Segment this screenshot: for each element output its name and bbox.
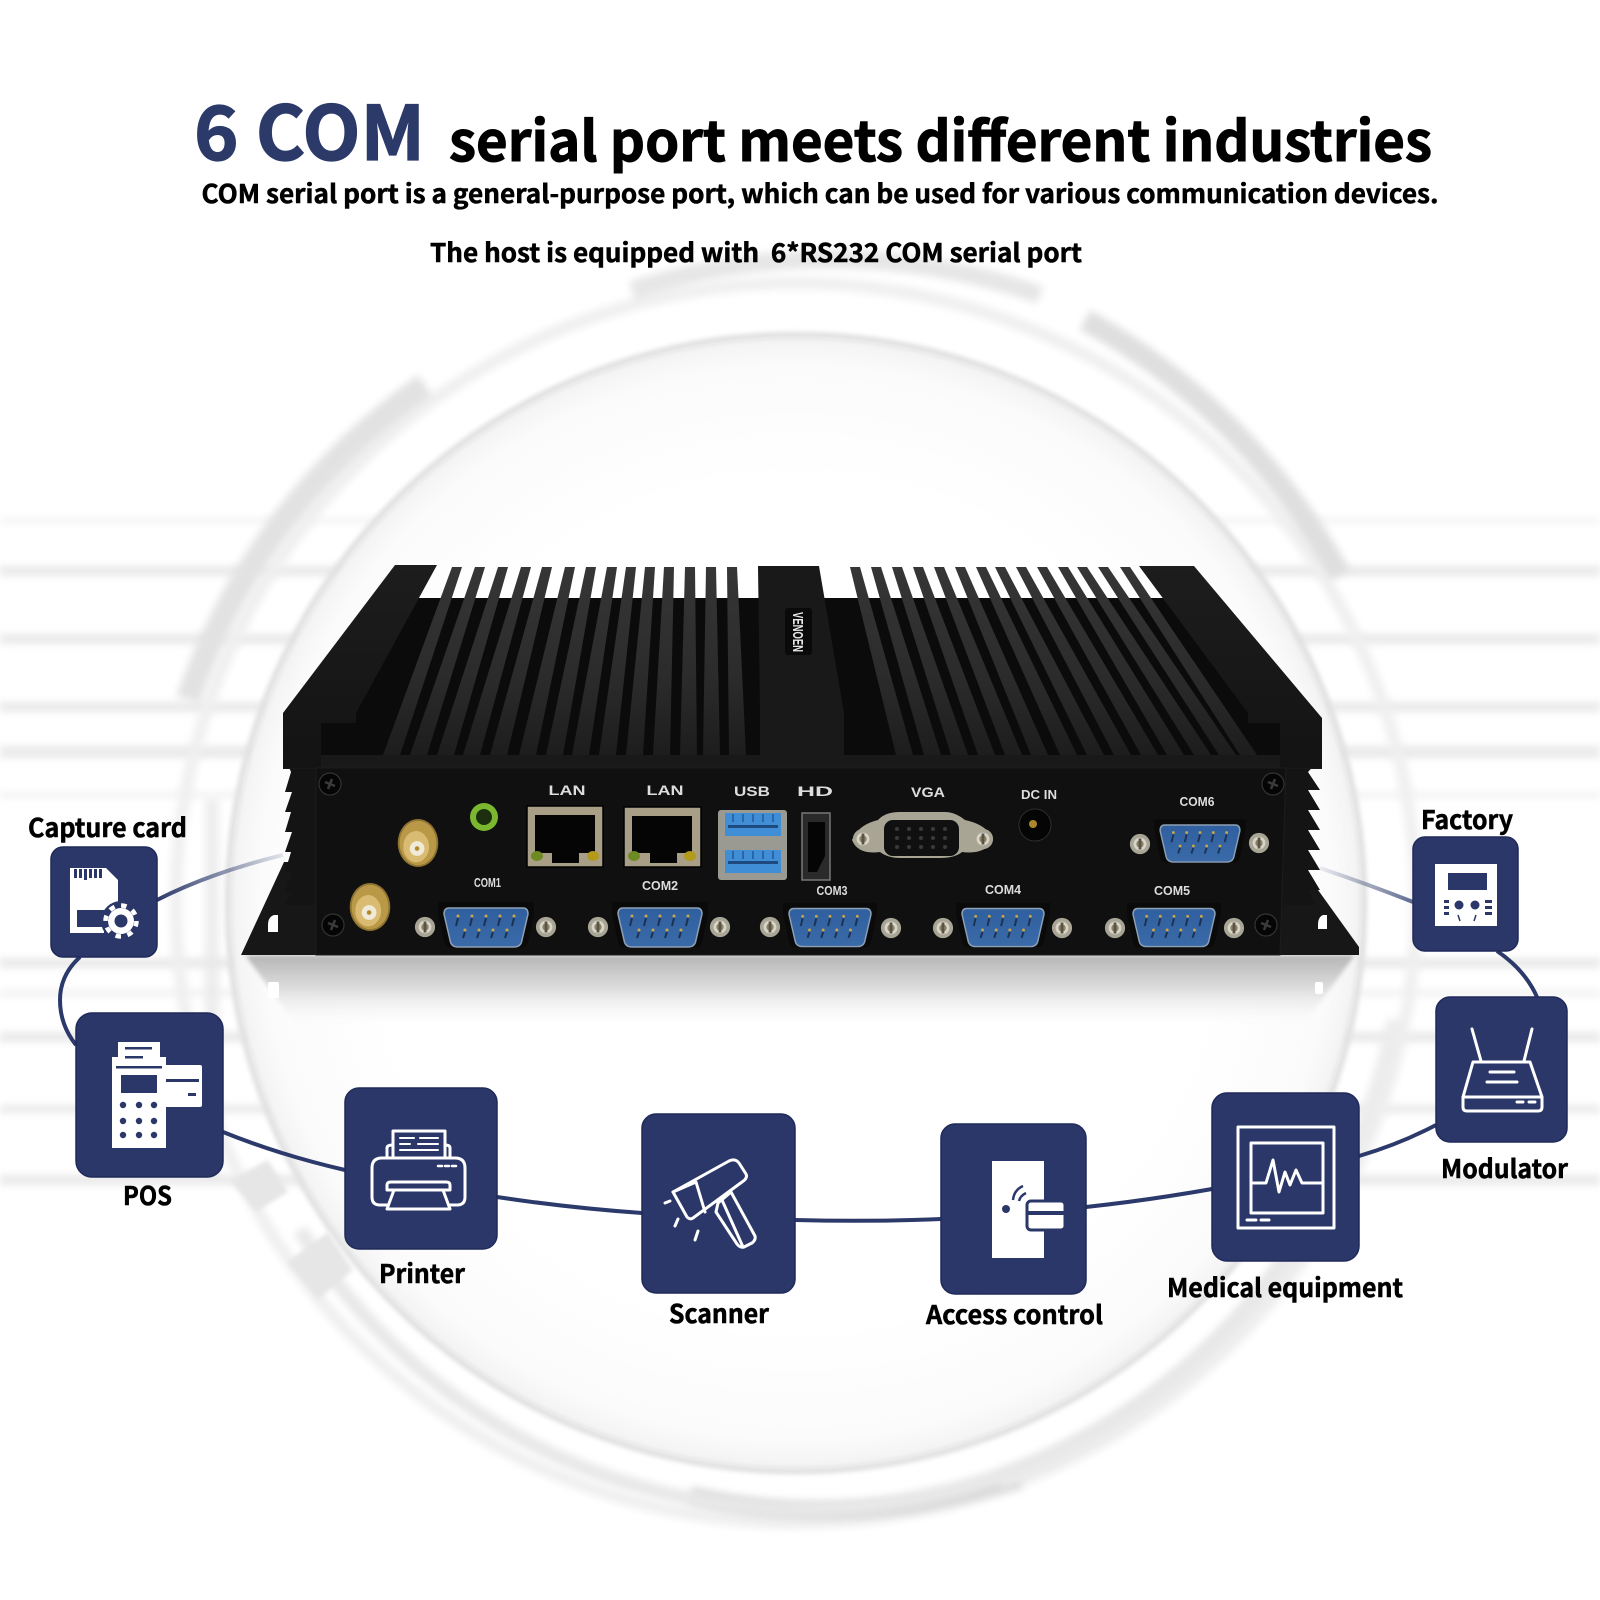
DC power jack [1019,809,1051,841]
icon: SD card with gear [70,868,141,941]
icon: medical monitor [1238,1127,1334,1228]
icon: control panel [1435,864,1497,926]
port labels: COM6 [1180,794,1214,809]
node: Printer [345,1088,497,1291]
HDMI port [802,813,830,880]
node: Medical equipment: Medical equipment [1167,1268,1403,1305]
heatsink base [315,598,1290,768]
node: POS [76,1013,223,1213]
port labels: COM2 [642,878,678,893]
mini PC device [241,565,1359,955]
node: Modulator [1436,997,1569,1186]
mounting flanges [241,862,1359,955]
port labels: USB [734,783,770,799]
logo badge [785,608,812,655]
fins left [383,567,746,755]
COM ports [415,819,1269,948]
LAN ports [527,806,701,867]
port labels: DC IN [1021,787,1057,802]
port labels: VGA [911,784,945,800]
node: Modulator: Modulator [1441,1149,1569,1186]
node: Printer: Printer [379,1254,466,1291]
USB ports [718,810,787,880]
VGA port [852,812,993,858]
port labels: COM5 [1154,883,1190,898]
fins right [850,567,1257,755]
node: Access control [925,1124,1103,1332]
node: Capture card: Capture card [28,808,187,845]
title [194,73,1432,182]
title: serial port meets different industries [449,97,1432,177]
icon: door with card [992,1161,1065,1258]
center plate [758,566,844,755]
node: Access control: Access control [925,1295,1103,1332]
port labels: COM1 [474,875,501,890]
node: Scanner [642,1114,795,1331]
panel screws [319,773,1284,936]
port labels: COM3 [816,883,848,898]
connectors [60,855,1537,1221]
subtitle: COM serial port is a general-purpose port, which can be used for various communication devices. [202,174,1438,211]
port labels: COM4 [985,882,1022,897]
icon: router [1463,1029,1542,1111]
port labels: LAN [646,782,684,798]
side vent fins [285,758,1321,905]
node: Capture card [28,808,187,957]
front panel [316,768,1286,955]
icon: barcode scanner [665,1160,755,1247]
front upper band [283,755,1322,769]
node: Factory [1413,800,1518,951]
right rail [1139,566,1322,768]
node: Factory: Factory [1421,800,1513,837]
node: POS: POS [123,1176,172,1213]
left rail [283,565,437,768]
icon: printer [372,1131,465,1209]
node: Scanner: Scanner [669,1294,770,1331]
port note: The host is equipped with 6*RS232 COM serial port [430,233,1082,270]
flange slots [268,915,1327,932]
antenna connectors [350,819,438,931]
port labels: LAN [548,782,586,798]
icon: POS terminal [112,1042,202,1148]
port labels: HD [797,783,833,799]
device reflection [245,955,1355,1030]
logo badge: VENOEN [789,612,806,652]
title: 6 COM [194,73,425,182]
node: Medical equipment [1167,1093,1403,1305]
port labels [474,782,1214,898]
audio jack [470,803,498,831]
